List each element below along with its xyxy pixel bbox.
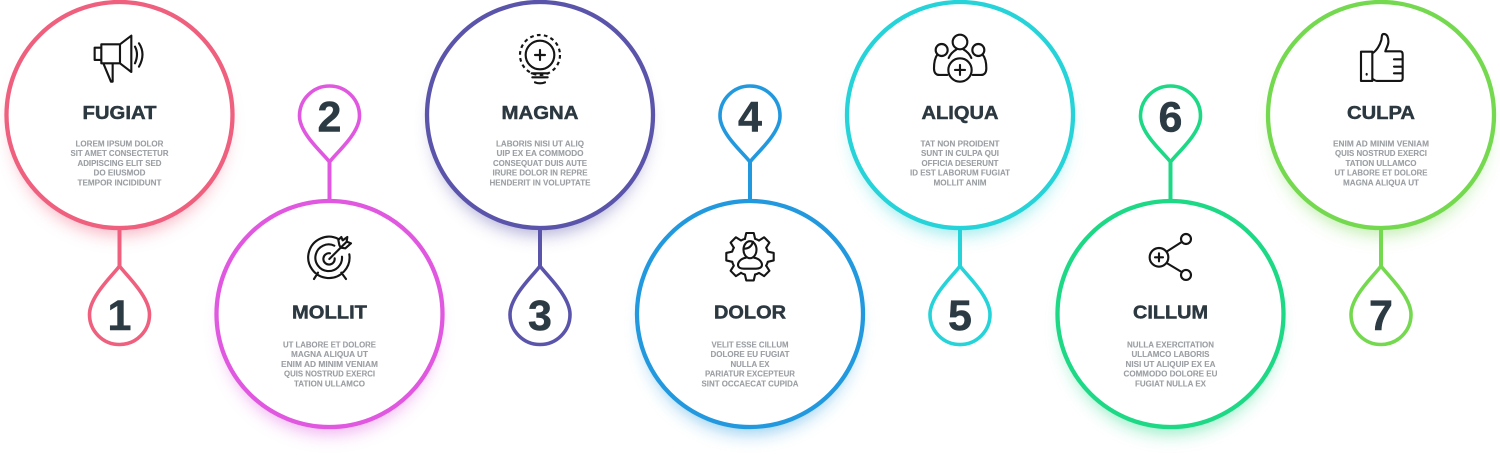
- heading: MAGNA: [502, 103, 578, 123]
- body text: ULLAMCO LABORIS: [1132, 350, 1210, 359]
- body text: ENIM AD MINIM VENIAM: [281, 360, 378, 369]
- body text: [70, 140, 169, 187]
- heading: MOLLIT: [292, 302, 367, 322]
- circle panel 2: [216, 201, 442, 427]
- body text: COMMODO DOLORE EU: [1124, 370, 1218, 379]
- body text: NULLA EXERCITATION: [1127, 340, 1214, 350]
- number 6: 6: [1159, 94, 1182, 142]
- body text: IRURE DOLOR IN REPRE: [492, 169, 588, 178]
- number 1: 1: [108, 292, 131, 340]
- body text: SIT AMET CONSECTETUR: [70, 149, 169, 158]
- circle panel 6: [1058, 201, 1284, 427]
- body text: ENIM AD MINIM VENIAM: [1333, 140, 1429, 148]
- body text: NISI UT ALIQUIP EX EA: [1126, 360, 1216, 369]
- circle panel 7: [1268, 2, 1494, 228]
- body text: DO EIUSMOD: [94, 169, 146, 178]
- icon: target: [308, 237, 351, 279]
- body text: LABORIS NISI UT ALIQ: [496, 140, 584, 148]
- body text: UT LABORE ET DOLORE: [1334, 169, 1428, 178]
- body text: PARIATUR EXCEPTEUR: [705, 370, 795, 379]
- number 7: 7: [1369, 292, 1393, 340]
- pin 3: [510, 266, 570, 344]
- step 2: mollit: [216, 86, 442, 433]
- body text: TAT NON PROIDENT: [920, 140, 1000, 148]
- body text: MOLLIT ANIM: [934, 178, 987, 187]
- body text: TATION ULLAMCO: [294, 379, 365, 388]
- circle panel 1: [6, 2, 232, 228]
- body text: DOLORE EU FUGIAT: [710, 350, 790, 359]
- icon: share nodes with plus: [1150, 234, 1191, 280]
- pin 4: [720, 86, 780, 162]
- pin 6: [1140, 86, 1200, 162]
- pin 2: [300, 86, 360, 162]
- body text: ADIPISCING ELIT SED: [78, 159, 162, 168]
- step 7: culpa: [1268, 2, 1494, 344]
- heading: CULPA: [1347, 103, 1415, 123]
- body text: QUIS NOSTRUD EXERCI: [1335, 149, 1427, 158]
- icon: megaphone: [95, 36, 142, 82]
- body text: [1333, 140, 1429, 187]
- heading: ALIQUA: [922, 103, 998, 123]
- pin 1: [90, 266, 150, 344]
- body text: [1124, 340, 1218, 388]
- step 4: dolor: [637, 86, 863, 433]
- number 3: 3: [528, 292, 552, 340]
- body text: LOREM IPSUM DOLOR: [76, 140, 164, 148]
- number 2: 2: [318, 94, 341, 142]
- icon: group with plus: [934, 35, 986, 82]
- heading: CILLUM: [1133, 302, 1208, 322]
- circle panel 4: [637, 201, 863, 427]
- number 4: 4: [738, 94, 762, 142]
- body text: SUNT IN CULPA QUI: [921, 149, 999, 158]
- body text: [490, 140, 591, 187]
- body text: TATION ULLAMCO: [1346, 159, 1416, 168]
- body text: NULLA EX: [730, 360, 770, 369]
- body text: FUGIAT NULLA EX: [1135, 379, 1207, 388]
- number 5: 5: [948, 292, 972, 340]
- step 6: cillum: [1058, 86, 1284, 433]
- body text: QUIS NOSTRUD EXERCI: [284, 370, 375, 379]
- body text: [702, 340, 799, 388]
- icon: gear with person: [726, 233, 774, 280]
- circle panel 3: [427, 2, 653, 228]
- body text: CONSEQUAT DUIS AUTE: [493, 159, 588, 168]
- body text: UT LABORE ET DOLORE: [283, 340, 377, 350]
- heading: DOLOR: [714, 302, 786, 322]
- body text: TEMPOR INCIDIDUNT: [78, 178, 162, 187]
- step 5: aliqua: [847, 2, 1073, 345]
- body text: [910, 140, 1010, 187]
- icon: thumbs up: [1361, 34, 1403, 81]
- body text: [281, 340, 378, 388]
- body text: ID EST LABORUM FUGIAT: [910, 169, 1010, 178]
- pin 7: [1351, 266, 1411, 344]
- body text: UIP EX EA COMMODO: [496, 149, 584, 158]
- icon: light bulb with plus: [520, 35, 560, 83]
- pin 5: [930, 266, 990, 345]
- body text: SINT OCCAECAT CUPIDA: [702, 379, 799, 388]
- body text: MAGNA ALIQUA UT: [291, 350, 368, 359]
- step 3: magna: [427, 2, 653, 344]
- heading: FUGIAT: [82, 103, 157, 123]
- body text: MAGNA ALIQUA UT: [1343, 178, 1419, 187]
- circle panel 5: [847, 2, 1073, 228]
- body text: OFFICIA DESERUNT: [922, 159, 999, 168]
- step 1: fugiat: [6, 2, 232, 344]
- body text: HENDERIT IN VOLUPTATE: [490, 178, 591, 187]
- body text: VELIT ESSE CILLUM: [712, 340, 789, 350]
